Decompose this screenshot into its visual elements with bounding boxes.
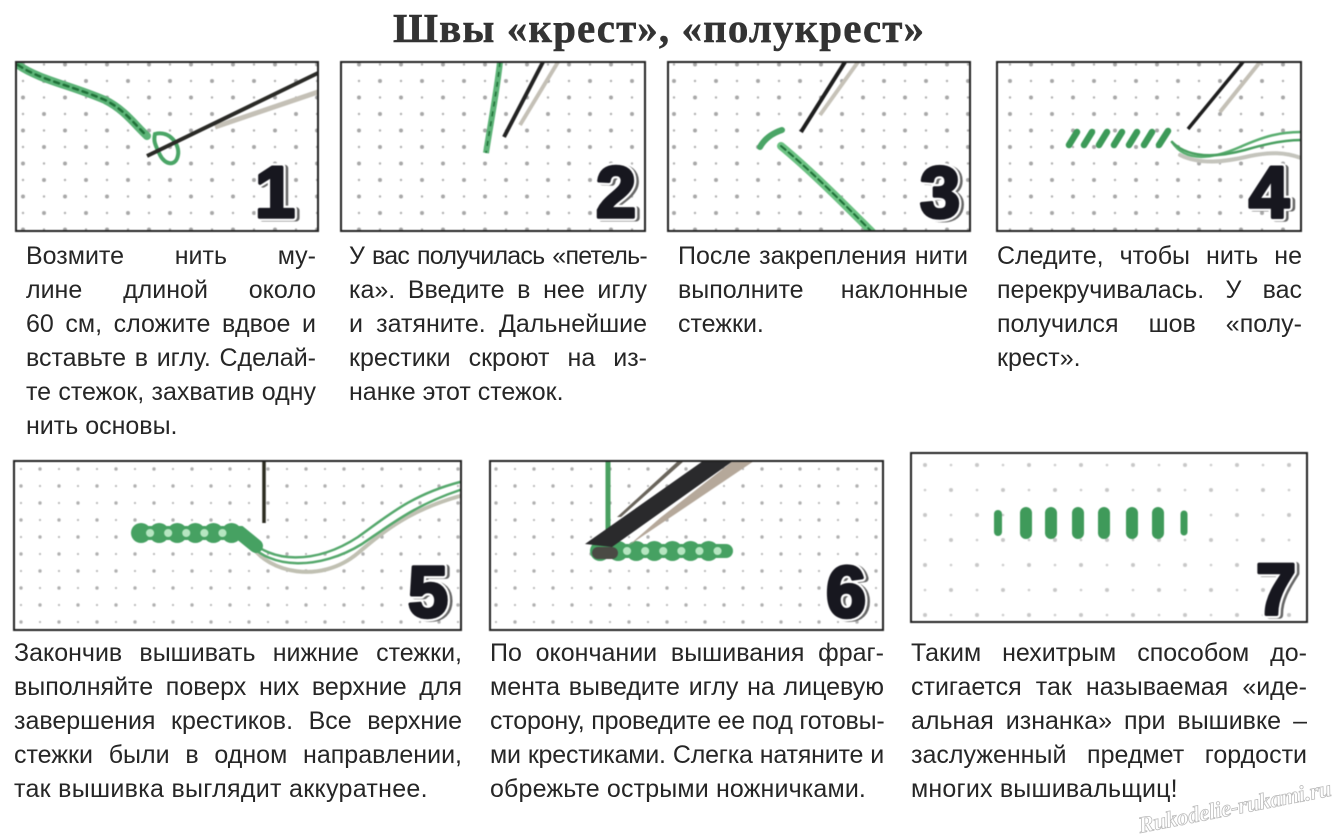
text: step 6: обрежьте острыми ножничками. <box>490 775 866 803</box>
text: step 5: завершения крестиков. Все верхние <box>14 707 462 735</box>
text: step 2: и затяните. Дальнейшие <box>349 310 647 338</box>
number 2: 2 <box>596 153 636 232</box>
text: step 1: нить основы. <box>26 412 178 440</box>
thread <box>18 65 178 163</box>
text: step 5: Закончив вышивать нижние стежки, <box>14 639 462 667</box>
chain of stitches <box>141 533 256 546</box>
half-cross stitches <box>1069 131 1168 145</box>
thread tails <box>248 482 460 572</box>
scissors <box>585 461 754 547</box>
panel: step 6 photo <box>488 459 885 632</box>
text: step 3: стежки. <box>678 310 764 338</box>
text: step 7: многих вышивальщиц! <box>911 775 1178 803</box>
needle <box>147 73 318 156</box>
text: step 1: вставьте в иглу. Сделай- <box>26 344 316 372</box>
number 1: 1 <box>258 154 298 232</box>
text: step 4 <box>997 242 1302 372</box>
number 2: 2 <box>599 154 639 232</box>
panel: step 1 photo <box>14 60 320 233</box>
needle shadow <box>215 92 318 127</box>
number 3: 3 <box>920 153 960 232</box>
text: step 1: 60 см, сложите вдвое и <box>26 310 316 338</box>
panel: step 4 photo <box>995 60 1303 233</box>
panel: step 3 photo <box>666 60 972 233</box>
text: step 5: стежки были в одном направлении, <box>14 741 462 769</box>
text: step 5: выполняйте поверх них верхние для <box>14 673 462 701</box>
number 5: 5 <box>408 553 448 631</box>
text: step 2: крестики скроют на из- <box>349 344 647 372</box>
text: step 1: лине длиной около <box>26 276 316 304</box>
needle <box>504 62 543 137</box>
text: step 2: У вас получилась «петель- <box>349 242 647 270</box>
text: step 7: заслуженный предмет гордости <box>911 741 1307 769</box>
thread <box>486 62 500 153</box>
panel: step 2 photo <box>339 60 647 233</box>
back-side stitches <box>998 513 1184 533</box>
number 1: 1 <box>255 153 295 232</box>
needle <box>801 62 845 132</box>
thread <box>760 130 872 232</box>
text: step 7: Таким нехитрым способом до- <box>911 639 1307 667</box>
text: step 1 <box>26 242 316 440</box>
text: step 2 <box>349 242 647 406</box>
number 3: 3 <box>920 153 960 232</box>
needle shadow <box>1220 62 1260 112</box>
text: step 7 <box>911 639 1307 803</box>
text: step 4: Следите, чтобы нить не <box>997 242 1302 270</box>
number 5: 5 <box>408 553 448 631</box>
panel: step 7 photo <box>909 451 1309 624</box>
number 2: 2 <box>596 153 636 232</box>
text: step 4: получился шов «полу- <box>997 310 1302 338</box>
needle shadow <box>820 62 858 115</box>
number 3: 3 <box>923 154 963 232</box>
text: step 6: По окончании вышивания фраг- <box>490 639 884 667</box>
thread <box>606 461 610 535</box>
text: step 4: перекручивалась. У вас <box>997 276 1302 304</box>
number 4: 4 <box>1252 154 1292 232</box>
text: step 6: ми крестиками. Слегка натяните и <box>490 741 884 769</box>
needle <box>1188 62 1243 129</box>
text: step 1: те стежок, захватив одну <box>26 378 316 406</box>
number 4: 4 <box>1249 153 1289 232</box>
chain of stitches <box>598 551 726 553</box>
number 4: 4 <box>1249 153 1289 232</box>
text: step 1: Возмите нить му- <box>26 242 316 270</box>
text: step 2: ка». Введите в нее иглу <box>349 276 647 304</box>
text: step 4: крест». <box>997 344 1081 372</box>
text: step 6: мента выведите иглу на лицевую <box>490 673 884 701</box>
text: step 3: После закрепления нити <box>678 242 968 270</box>
text: step 5: так вышивка выглядит аккуратнее. <box>14 775 428 803</box>
number 6: 6 <box>826 553 866 631</box>
panel: step 5 photo <box>12 459 463 632</box>
text: step 7: стигается так называемая «иде- <box>911 673 1307 701</box>
number 1: 1 <box>255 153 295 232</box>
text: step 6: сторону, проведите ее под готовы- <box>490 707 884 735</box>
title: Швы «крест», «полукрест» <box>393 5 924 51</box>
text: step 7: альная изнанка» при вышивке – <box>911 707 1307 735</box>
needle <box>262 461 266 523</box>
text: step 5 <box>14 639 462 803</box>
number 6: 6 <box>826 553 866 631</box>
text: step 3 <box>678 242 968 338</box>
text: step 6 <box>490 639 884 803</box>
text: step 3: выполните наклонные <box>678 276 968 304</box>
needle shadow <box>520 62 558 125</box>
thread tails <box>1172 132 1301 162</box>
text: step 2: нанке этот стежок. <box>349 378 564 406</box>
